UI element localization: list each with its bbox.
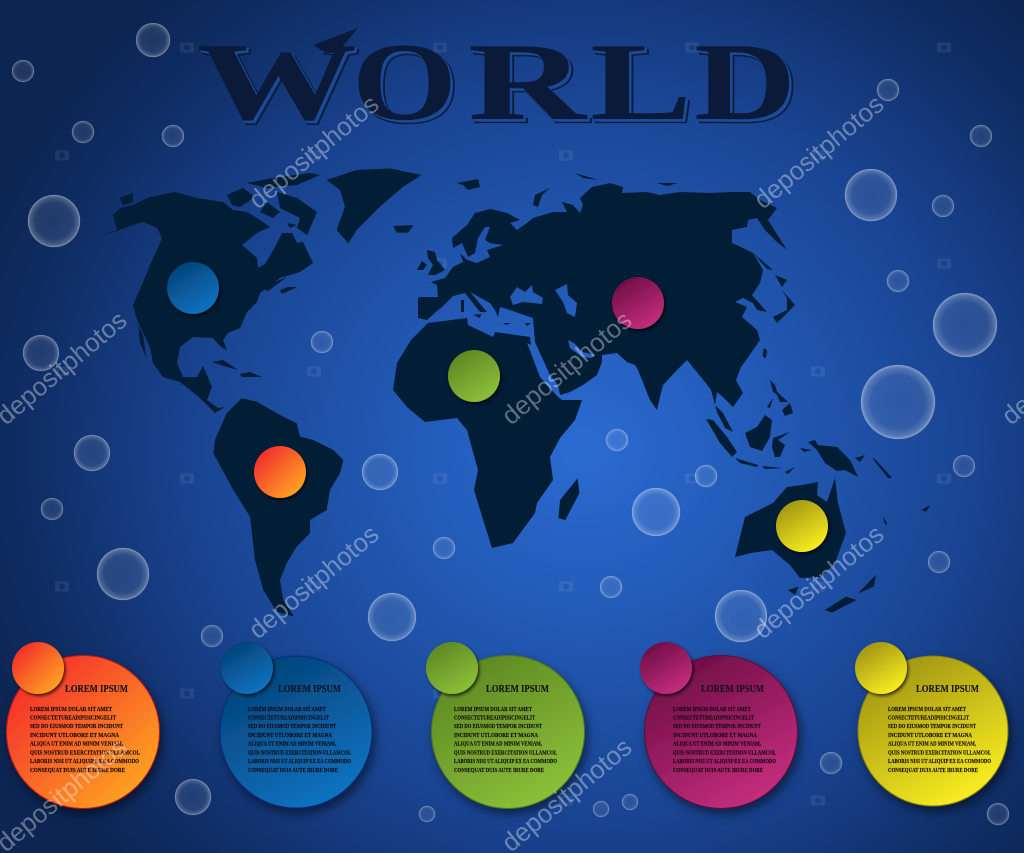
watermark text: depositphotos (748, 89, 889, 215)
orange body text: LABORIS NISI UT ALIQUIP EX EA COMMODO (30, 758, 139, 765)
orange body text: QUIS NOSTRUD EXERCITATION ULLAMCOL (30, 750, 140, 756)
map: Greenland and Iceland (327, 168, 422, 243)
magenta body text (673, 706, 776, 774)
magenta heading: LOREM IPSUM (701, 684, 764, 695)
title: WORLD: R (470, 23, 590, 146)
orange body text: INCIDUNT UTLOBORE ET MAGNA (30, 732, 119, 739)
watermark text: depositphotos (243, 519, 384, 645)
map marker: Australia (776, 500, 828, 552)
panel: blue (220, 642, 372, 808)
yellow body text: CONSEQUAT DUIS AUTE IRURE DORE (888, 767, 978, 774)
title: WORLD: W (200, 24, 360, 148)
map: Madagascar, Tasmania, New Zealand (558, 348, 930, 613)
orange body text (30, 706, 140, 774)
map: Japan and Sakhalin (753, 253, 795, 323)
title: WORLD: D (696, 23, 798, 146)
panel: orange (6, 642, 160, 808)
blue body text: INCIDUNT UTLOBORE ET MAGNA (248, 732, 332, 739)
title: WORLD: O (352, 21, 457, 144)
title: WORLD: L (592, 23, 694, 146)
map marker: North America (167, 262, 219, 314)
yellow body text: SED DO EIUSMOD TEMPOR INCIDUNT (888, 723, 976, 730)
green body text: QUIS NOSTRUD EXERCITATION ULLAMCOL (454, 750, 557, 756)
map: South America (213, 398, 343, 617)
green body text: LABORIS NISI UT ALIQUIP EX EA COMMODO (454, 758, 557, 765)
yellow body text: LOREM IPSUM DOLAR SIT AMET (888, 706, 966, 713)
yellow body text: ALIQUA UT ENIM AD MINIM VENIAM, (888, 740, 976, 748)
map marker: Asia (612, 277, 664, 329)
map: European and Arctic islands (417, 173, 678, 326)
yellow badge (855, 642, 907, 694)
watermark text: depositphotos (748, 519, 889, 645)
yellow heading: LOREM IPSUM (916, 684, 979, 695)
map: Australia (735, 478, 846, 578)
magenta body text: SED DO EIUSMOD TEMPOR INCIDUNT (673, 723, 761, 730)
blue body text: LABORIS NISI UT ALIQUIP EX EA COMMODO (248, 758, 351, 765)
map: Arctic Canada (120, 173, 320, 235)
title: WORLD: W (199, 23, 359, 146)
watermark camera icons (55, 42, 951, 806)
yellow body text (888, 706, 991, 774)
green body text: CONSECTETUREADIPISICINGELIT (454, 714, 535, 722)
green body text: LOREM IPSUM DOLAR SIT AMET (454, 706, 532, 713)
magenta badge (640, 642, 692, 694)
blue badge (221, 642, 273, 694)
watermark text: depositphotos (243, 89, 384, 215)
magenta body text: CONSEQUAT DUIS AUTE IRURE DORE (673, 767, 763, 774)
blue body text: ALIQUA UT ENIM AD MINIM VENIAM, (248, 740, 336, 748)
magenta body text: CONSECTETUREADIPISICINGELIT (673, 714, 754, 722)
orange body text: ALIQUA UT ENIM AD MINIM VENIAM, (30, 740, 123, 748)
yellow body text: INCIDUNT UTLOBORE ET MAGNA (888, 732, 972, 739)
panel: green (426, 642, 584, 808)
orange heading: LOREM IPSUM (65, 684, 128, 695)
green badge (426, 642, 478, 694)
title: WORLD: O (354, 23, 459, 146)
blue body text: QUIS NOSTRUD EXERCITATION ULLAMCOL (248, 750, 351, 756)
green body text: INCIDUNT UTLOBORE ET MAGNA (454, 732, 538, 739)
map: North America (100, 192, 313, 413)
magenta body text: QUIS NOSTRUD EXERCITATION ULLAMCOL (673, 750, 776, 756)
blue heading: LOREM IPSUM (278, 684, 341, 695)
orange badge (12, 642, 64, 694)
orange body text: CONSECTETUREADIPISICINGELIT (30, 714, 116, 722)
panel: magenta (640, 642, 798, 808)
watermark text: depositphotos (496, 305, 637, 431)
world map (100, 168, 930, 617)
title: WORLD: W (197, 21, 357, 144)
magenta body text: LOREM IPSUM DOLAR SIT AMET (673, 706, 751, 713)
green body text: CONSEQUAT DUIS AUTE IRURE DORE (454, 767, 544, 774)
map marker: South America (254, 446, 306, 498)
blue body text: CONSECTETUREADIPISICINGELIT (248, 714, 329, 722)
title: WORLD: D (694, 21, 796, 144)
title: WORLD: L (594, 24, 696, 148)
map: Southeast Asia islands (706, 380, 892, 478)
green body text (454, 706, 557, 774)
title: WORLD: R (468, 21, 589, 144)
orange body text: SED DO EIUSMOD TEMPOR INCIDUNT (30, 723, 123, 730)
map marker: Africa (448, 350, 500, 402)
green body text: ALIQUA UT ENIM AD MINIM VENIAM, (454, 740, 542, 748)
magenta body text: INCIDUNT UTLOBORE ET MAGNA (673, 732, 757, 739)
map: Africa (393, 318, 582, 548)
blue body text (248, 706, 351, 774)
yellow body text: CONSECTETUREADIPISICINGELIT (888, 714, 969, 722)
map: Baja California (138, 325, 146, 357)
green heading: LOREM IPSUM (486, 684, 549, 695)
title: WORLD: D (698, 24, 800, 148)
magenta body text: ALIQUA UT ENIM AD MINIM VENIAM, (673, 740, 761, 748)
map: Eurasia (418, 183, 787, 432)
orange body text: CONSEQUAT DUIS AUTE IRURE DORE (30, 767, 125, 774)
blue body text: LOREM IPSUM DOLAR SIT AMET (248, 706, 326, 713)
title: WORLD: O (356, 24, 460, 148)
map: Newfoundland and Caribbean (212, 277, 297, 377)
magenta body text: LABORIS NISI UT ALIQUIP EX EA COMMODO (673, 758, 776, 765)
blue body text: SED DO EIUSMOD TEMPOR INCIDUNT (248, 723, 336, 730)
orange body text: LOREM IPSUM DOLAR SIT AMET (30, 706, 112, 713)
green body text: SED DO EIUSMOD TEMPOR INCIDUNT (454, 723, 542, 730)
blue body text: CONSEQUAT DUIS AUTE IRURE DORE (248, 767, 338, 774)
panel: yellow (855, 642, 1008, 806)
title: WORLD (197, 21, 800, 148)
title: WORLD: L (590, 21, 692, 144)
title: WORLD: R (472, 24, 592, 148)
